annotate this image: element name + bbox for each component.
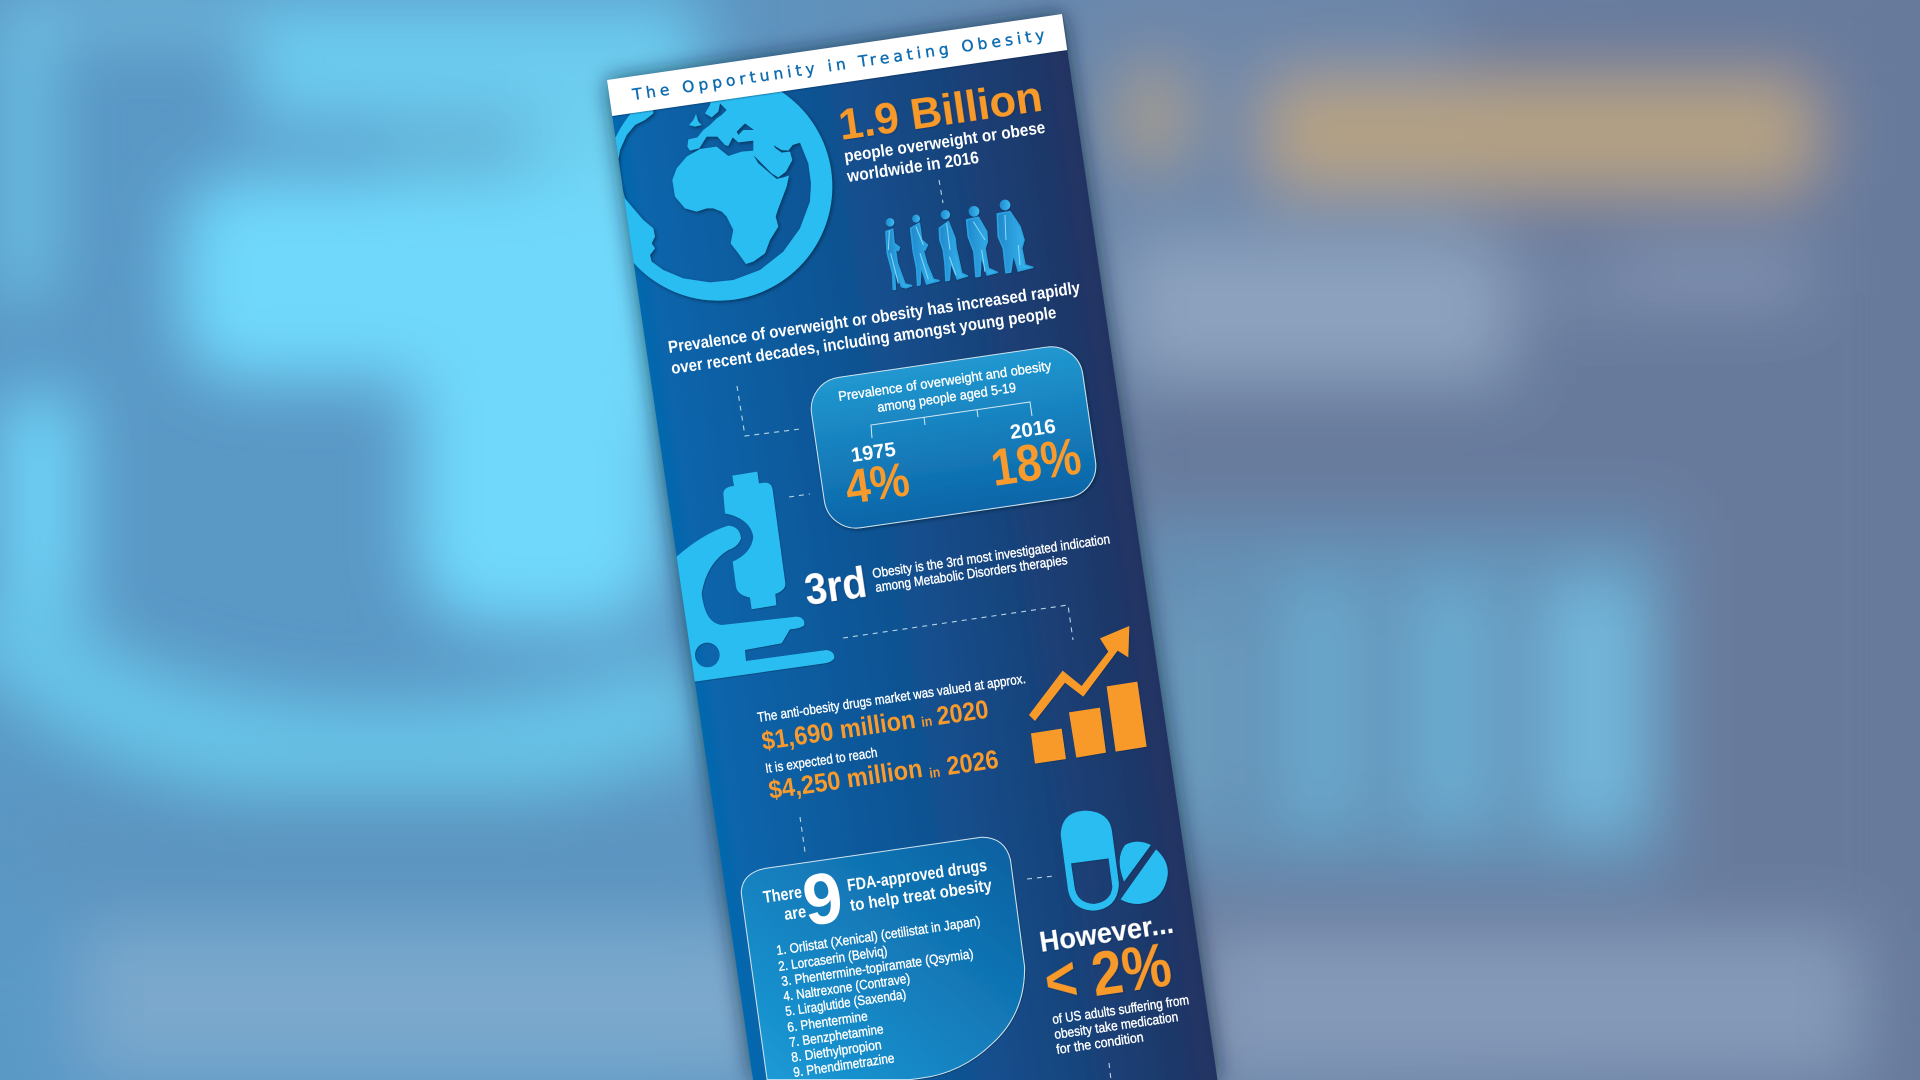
icon: globe bbox=[616, 92, 836, 304]
header band bbox=[607, 14, 1067, 116]
icon: pills bbox=[1061, 811, 1168, 911]
stat: 2016: 18% bbox=[987, 427, 1085, 498]
text: people overweight: people overweight or obese bbox=[843, 118, 1046, 166]
stat: 1975: 4% bbox=[842, 453, 913, 515]
text: market value: 2020 bbox=[935, 694, 990, 731]
drug list: 7. Benzphetamine bbox=[788, 1021, 884, 1050]
drugs heading: 9 bbox=[798, 857, 848, 942]
stat: 1975: 1975 bbox=[850, 439, 897, 467]
icon: rising bar chart with arrow bbox=[1029, 626, 1147, 764]
stat: 1.9 Billion: 1.9 Billion bbox=[835, 72, 1045, 150]
text: market value: It is expected to reach bbox=[764, 745, 878, 776]
text: people overweight: worldwide in 2016 bbox=[845, 148, 980, 186]
drug list: 4. Naltrexone (Contrave) bbox=[782, 971, 911, 1004]
text: 3rd most investigated bbox=[871, 531, 1111, 595]
panel: FDA-approved drugs bbox=[741, 837, 1025, 1080]
text: market value: in bbox=[920, 713, 933, 730]
stat: 3rd: 3rd bbox=[801, 557, 870, 615]
drug list: 1. Orlistat (Xenical) (cetilistat in Japan) bbox=[775, 913, 981, 958]
stat: 2016: 2016 bbox=[1009, 416, 1057, 444]
text: US adults: of US adults suffering from bbox=[1051, 992, 1190, 1027]
panel: infographic card bbox=[604, 14, 1218, 1080]
text: US adults: obesity take medication bbox=[1053, 1009, 1179, 1042]
stat: less than 2%: < 2% bbox=[1040, 930, 1176, 1017]
text: 3rd most investigated: among Metabolic Disorders therapies bbox=[874, 552, 1069, 595]
text: market value: $4,250 million bbox=[767, 753, 924, 805]
text: people overweight bbox=[843, 118, 1046, 186]
drug list: 8. Diethylpropion bbox=[790, 1037, 882, 1065]
panel: prevalence 5-19 bbox=[807, 342, 1100, 532]
box heading: Prevalence of overweight and obesity bbox=[837, 358, 1052, 404]
text: market value bbox=[756, 671, 1027, 805]
text: 3rd most investigated: Obesity is the 3rd most investigated indication bbox=[871, 531, 1111, 581]
text: market value: 2026 bbox=[945, 744, 1000, 781]
drugs heading: are bbox=[783, 902, 807, 924]
drug list: 6. Phentermine bbox=[786, 1008, 869, 1035]
text: prevalence statement: over recent decades, including amongst young people bbox=[670, 303, 1058, 378]
icon: microscope bbox=[670, 472, 834, 685]
drug list: 3. Phentermine-topiramate (Qsymia) bbox=[780, 946, 974, 989]
text: prevalence statement: Prevalence of overweight or obesity has increased rapidly bbox=[667, 278, 1082, 357]
icon: five figures bbox=[886, 200, 1033, 289]
text: market value: $1,690 million bbox=[760, 704, 917, 756]
drugs heading bbox=[762, 856, 994, 942]
drug list: 5. Liraglutide (Saxenda) bbox=[784, 987, 907, 1019]
text: market value: The anti-obesity drugs market was valued at approx. bbox=[756, 671, 1027, 725]
text: US adults: for the condition bbox=[1055, 1029, 1145, 1057]
text: However: However... bbox=[1037, 908, 1176, 959]
drugs heading: There bbox=[762, 883, 803, 907]
text: US adults bbox=[1051, 992, 1190, 1057]
drug list: 9. Phendimetrazine bbox=[792, 1050, 895, 1080]
drug list: 2. Lorcaserin (Belviq) bbox=[777, 943, 888, 974]
drugs heading: FDA-approved drugs bbox=[846, 856, 988, 895]
text: market value: in bbox=[928, 764, 941, 781]
drugs heading: to help treat obesity bbox=[849, 875, 994, 915]
box heading: among people aged 5-19 bbox=[876, 380, 1017, 415]
title: The Opportunity in Treating Obesity bbox=[630, 26, 1046, 104]
drug list bbox=[775, 913, 981, 1080]
